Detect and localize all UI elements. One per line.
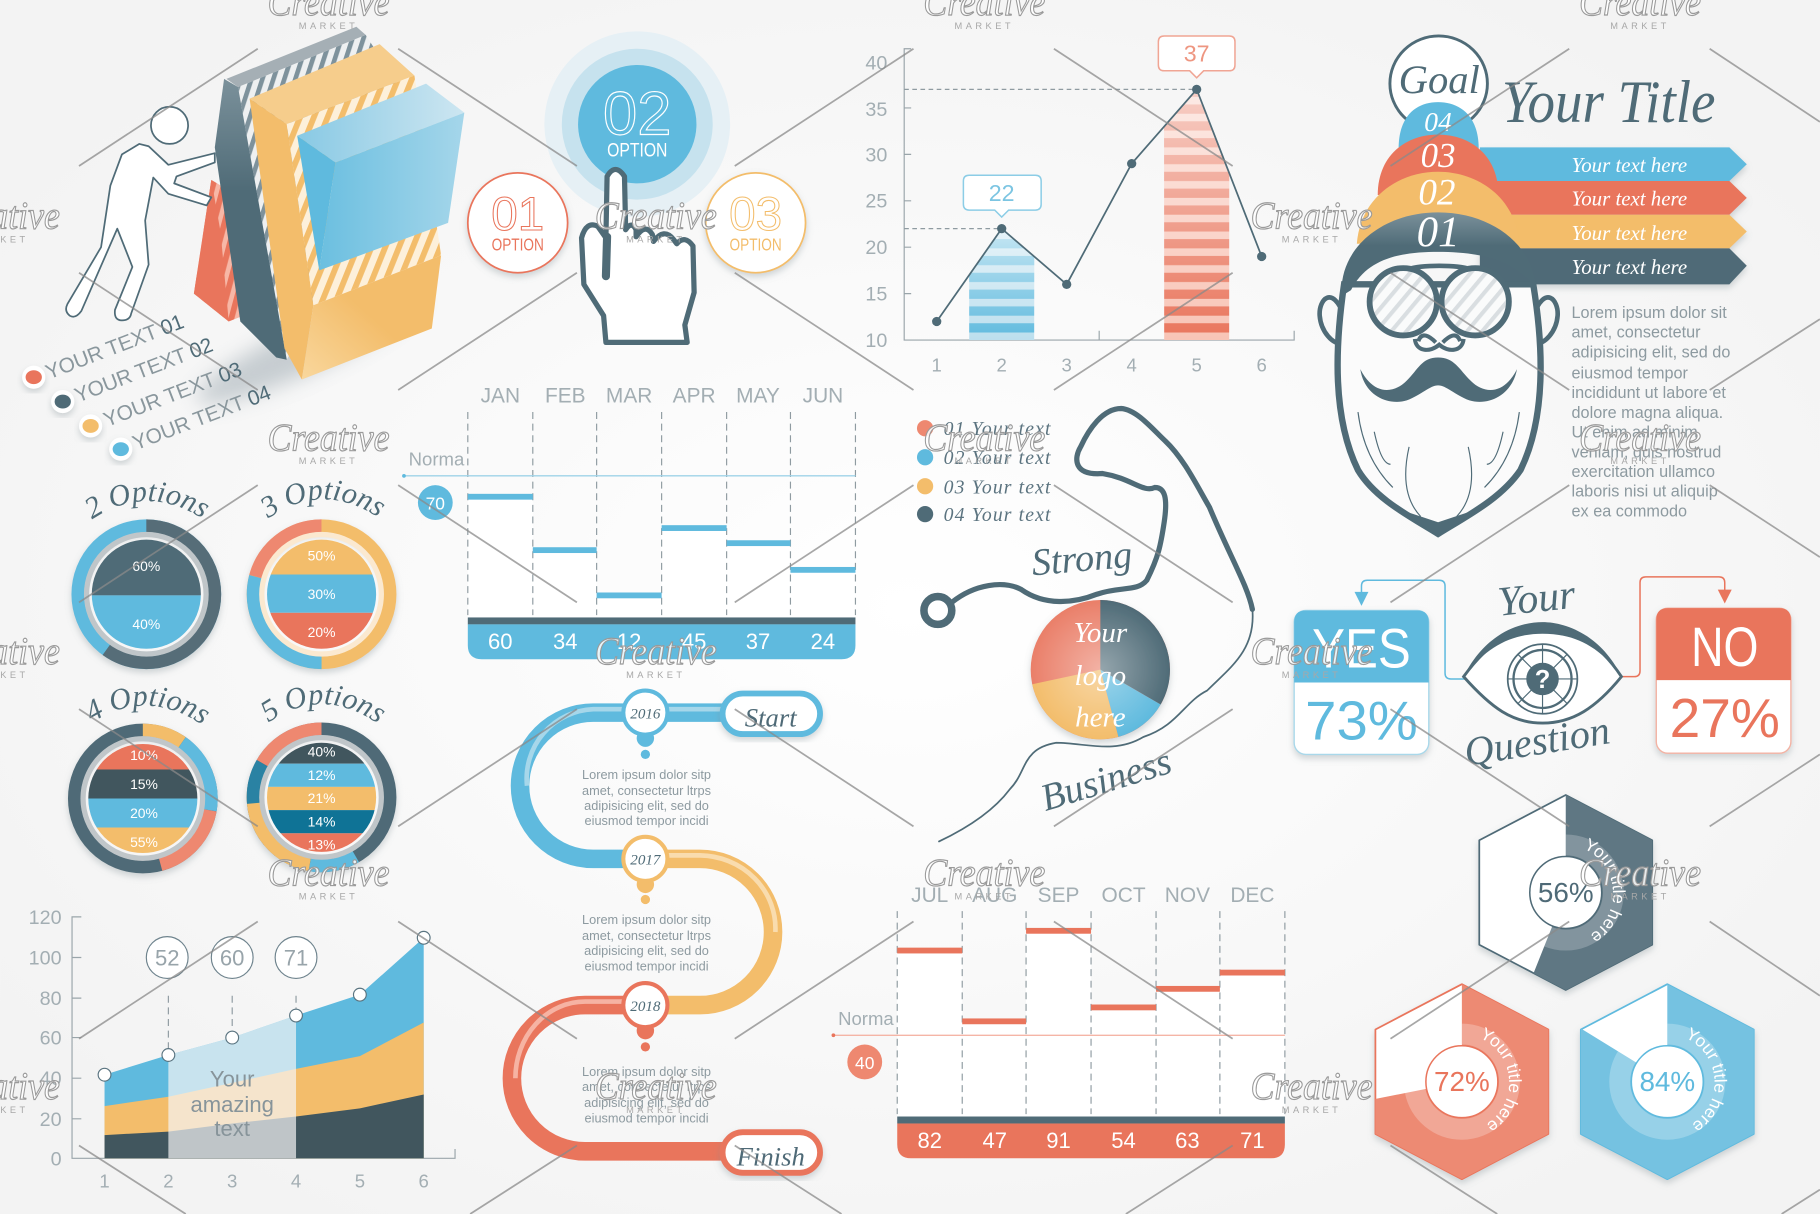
goal bubble	[1390, 36, 1487, 131]
watermarks: MARKET	[1282, 670, 1341, 680]
lorem block 3: adipisicing elit, sed do	[584, 1095, 709, 1110]
logo text: Your	[1073, 617, 1128, 649]
options donut 3: 20%	[308, 624, 335, 640]
paragraph: veniam, quis nostrud	[1572, 443, 1721, 461]
your label: Your	[1496, 572, 1578, 626]
hipster head: 01	[1417, 209, 1460, 256]
hat layers	[1357, 102, 1519, 244]
lorem block 1: adipisicing elit, sed do	[584, 798, 709, 813]
options donut 2: 60%	[132, 558, 160, 574]
value strip: 34	[553, 629, 578, 654]
amazing text: amazing	[191, 1092, 274, 1117]
goal bubble: Goal	[1399, 57, 1480, 102]
options donut 3: 30%	[308, 586, 335, 602]
options donut 4: 15%	[130, 776, 158, 792]
node 2016	[623, 691, 667, 759]
hexagon 84 percent: 84%	[1639, 1066, 1695, 1097]
line chart with striped bars	[865, 36, 1294, 375]
y axis labels: 35	[865, 99, 887, 121]
y axis labels: 0	[51, 1148, 62, 1170]
x axis labels: 4	[291, 1170, 301, 1191]
y axis labels: 60	[40, 1028, 62, 1050]
area chart: 60	[220, 946, 244, 971]
legend	[917, 418, 1051, 526]
lorem block 1: amet, consectetur ltrps	[582, 783, 711, 798]
data line	[932, 85, 1266, 326]
red striped bar	[1164, 89, 1229, 340]
person pushing	[66, 107, 215, 320]
finish pill: Finish	[736, 1141, 805, 1171]
strong label: Strong	[1030, 534, 1134, 584]
month labels: NOV	[1165, 884, 1210, 907]
amazing text: Your	[210, 1066, 254, 1091]
options donut 5	[244, 686, 400, 878]
options donut 2: 40%	[132, 616, 160, 632]
norma line	[402, 448, 855, 520]
watermarks: Creative	[1251, 1064, 1373, 1108]
watermarks: MARKET	[1610, 456, 1670, 466]
dark area	[105, 1094, 424, 1158]
norma line: 70	[426, 494, 445, 514]
paragraph: exercitation ullamco	[1572, 463, 1715, 481]
yes box	[1294, 610, 1429, 754]
red road	[512, 1002, 743, 1151]
options donut 5: 12%	[308, 767, 335, 783]
logo text: here	[1075, 702, 1126, 734]
lorem block 2	[582, 912, 711, 973]
month labels: JUL	[911, 884, 948, 907]
options donut 4: 20%	[130, 805, 158, 821]
y axis labels: 80	[40, 988, 62, 1010]
option 03: OPTION	[730, 235, 782, 255]
hat layers: 03	[1421, 136, 1455, 175]
your title panel: Your text here	[1572, 153, 1687, 177]
heading: 3 Options	[261, 480, 384, 518]
red block	[194, 180, 240, 321]
watermarks: Creative	[1251, 194, 1373, 238]
options donut 4	[65, 688, 220, 880]
isometric legend	[22, 310, 274, 461]
x axis labels: 2	[163, 1170, 174, 1191]
value strip: 60	[488, 629, 513, 654]
month labels: DEC	[1230, 884, 1274, 907]
lorem block 1	[582, 767, 711, 828]
lorem block 1: Lorem ipsum dolor sitp	[582, 767, 711, 782]
node 2016: 2016	[630, 706, 661, 722]
yellow block	[250, 44, 441, 380]
paragraph: Ut enim ad minim	[1572, 424, 1698, 442]
your title panel: Your text here	[1572, 221, 1687, 245]
option 02: 02	[603, 80, 671, 149]
hexagon 56 percent	[1476, 794, 1656, 996]
paragraph: amet, consectetur	[1572, 324, 1701, 342]
option 01: 01	[491, 188, 544, 241]
value strip	[897, 1123, 1285, 1158]
watermarks: MARKET	[299, 891, 358, 901]
watermarks: Creative	[1579, 415, 1701, 459]
strong arm panel	[917, 409, 1253, 841]
month labels: AUG	[972, 884, 1017, 907]
hexagon 56 percent: 56%	[1538, 877, 1594, 908]
lorem block 3: amet, consectetur ltrps	[582, 1079, 711, 1094]
area chart	[29, 907, 455, 1191]
options donut 5: 14%	[308, 813, 335, 829]
month labels: OCT	[1102, 884, 1146, 907]
options donut 4: 55%	[130, 834, 158, 850]
watermarks: MARKET	[1282, 1105, 1341, 1115]
your title panel: Your text here	[1572, 186, 1687, 210]
month labels: FEB	[545, 385, 586, 408]
watermarks: Creative	[923, 415, 1045, 459]
x axis labels: 1	[932, 354, 942, 375]
hipster head	[1320, 209, 1558, 535]
your title panel: Your text here	[1572, 255, 1687, 279]
options donut 5: 13%	[308, 837, 335, 853]
x axis labels: 2	[997, 354, 1007, 375]
paragraph: laboris nisi ut aliquip	[1572, 483, 1718, 501]
hat layers: 02	[1418, 172, 1455, 213]
norma line: Norma	[838, 1008, 894, 1029]
amazing text	[191, 1066, 274, 1141]
area chart: 52	[155, 946, 179, 971]
paragraph: Lorem ipsum dolor sit	[1572, 304, 1727, 322]
y axis labels: 30	[865, 144, 887, 166]
ribbons	[1480, 147, 1747, 284]
y axis labels	[865, 53, 887, 352]
your title panel	[1320, 36, 1747, 535]
timeline road	[512, 691, 820, 1173]
area chart: 71	[284, 946, 308, 971]
level bars	[897, 928, 1285, 1024]
x axis labels: 5	[355, 1170, 365, 1191]
callout 22	[963, 175, 1041, 217]
x axis labels	[99, 1170, 429, 1191]
value strip: 47	[982, 1128, 1007, 1153]
callout 37: 37	[1184, 41, 1210, 67]
arm outline	[924, 409, 1253, 841]
y axis labels: 40	[40, 1068, 62, 1090]
legend: 01 Your text	[944, 418, 1051, 440]
options donut 5: 21%	[308, 790, 335, 806]
monthly chart red	[832, 884, 1285, 1158]
month labels: MAR	[606, 385, 652, 408]
paragraph: dolore magna aliqua.	[1572, 404, 1723, 422]
option circles with hand	[468, 31, 806, 342]
hat layers: 04	[1424, 107, 1452, 138]
month labels: MAY	[736, 385, 780, 408]
heading: 5 Options	[262, 686, 385, 722]
hexagon 72 percent: 72%	[1434, 1066, 1490, 1097]
paragraph	[1572, 304, 1730, 520]
watermarks: Creative	[268, 415, 389, 459]
paragraph: eiusmod tempor	[1572, 364, 1689, 382]
hexagon 72 percent	[1372, 983, 1552, 1185]
isometric legend: YOUR TEXT 03	[100, 358, 245, 432]
norma line: Norma	[409, 448, 465, 469]
x axis labels	[932, 354, 1267, 375]
yellow road	[647, 855, 775, 1005]
markers	[98, 931, 430, 1081]
value strip: 12	[617, 629, 641, 654]
no box	[1656, 608, 1791, 753]
x axis labels: 1	[99, 1170, 110, 1191]
month labels: SEP	[1038, 884, 1079, 907]
dark block	[215, 27, 418, 360]
paragraph: incididunt ut labore et	[1572, 384, 1726, 402]
value bubbles	[146, 937, 317, 978]
watermarks: MARKET	[626, 1105, 686, 1115]
start pill: Start	[745, 703, 797, 733]
legend: 04 Your text	[944, 504, 1051, 526]
y axis labels: 20	[865, 237, 887, 259]
no box: NO	[1691, 616, 1758, 678]
watermarks: Creative	[595, 194, 717, 238]
hexagon 56 percent: Your title here	[1588, 838, 1626, 941]
lorem block 2: adipisicing elit, sed do	[584, 943, 709, 958]
option 03: 03	[729, 188, 782, 241]
logo text: logo	[1075, 660, 1126, 692]
yes box: YES	[1312, 617, 1411, 679]
options donut 4: 10%	[130, 747, 158, 763]
value strip: 63	[1175, 1128, 1200, 1153]
option 01: OPTION	[492, 235, 544, 255]
hexagon 84 percent	[1577, 983, 1758, 1185]
finish pill	[723, 1132, 820, 1173]
hexagon 84 percent: Your title here	[1689, 1027, 1728, 1130]
blue striped bar	[969, 229, 1034, 340]
norma line: 40	[855, 1053, 874, 1073]
no box: 27%	[1670, 688, 1780, 749]
node 2017	[623, 837, 667, 904]
options donut 3	[244, 480, 400, 676]
watermarks: Creative	[1251, 629, 1373, 673]
x axis labels: 3	[1062, 354, 1072, 375]
callout 22: 22	[989, 180, 1015, 206]
option 01	[468, 173, 568, 273]
heading: 4 Options	[89, 688, 209, 723]
isometric legend: YOUR TEXT 01	[42, 310, 187, 384]
month labels: APR	[673, 385, 716, 408]
question panel	[1294, 572, 1791, 775]
lorem block 3: Lorem ipsum dolor sitp	[582, 1064, 711, 1079]
value strip	[468, 624, 855, 659]
amazing text: text	[214, 1116, 250, 1141]
lorem block 2: eiusmod tempor incidi	[585, 958, 709, 973]
lorem block 3	[582, 1064, 711, 1125]
node 2017: 2017	[630, 853, 662, 869]
y axis labels	[29, 907, 62, 1170]
hexagon 72 percent: Your title here	[1484, 1027, 1522, 1130]
isometric blocks with person	[66, 27, 464, 421]
blue area	[105, 938, 424, 1158]
watermarks: Creative	[1579, 851, 1701, 895]
x axis labels: 3	[227, 1170, 237, 1191]
yellow area	[105, 1022, 424, 1158]
option 02: OPTION	[607, 140, 667, 162]
blue road	[520, 709, 725, 859]
connectors	[1355, 577, 1732, 679]
y axis labels: 100	[29, 947, 62, 969]
option 02	[544, 31, 730, 217]
y axis labels: 120	[29, 907, 62, 929]
icon: eye: ?	[1535, 666, 1550, 694]
lorem block 1: eiusmod tempor incidi	[585, 813, 709, 828]
month labels	[911, 884, 1274, 907]
question label: Question	[1461, 707, 1613, 775]
watermarks: MARKET	[1282, 235, 1341, 245]
logo pie	[1031, 600, 1170, 739]
yes box: 73%	[1305, 690, 1418, 751]
logo text	[1073, 617, 1128, 734]
option 03	[706, 173, 806, 273]
node 2018	[623, 983, 667, 1052]
watermarks: MARKET	[955, 891, 1014, 901]
y axis labels: 10	[865, 330, 887, 352]
options donut 3: 50%	[308, 548, 335, 564]
x axis labels: 5	[1192, 354, 1202, 375]
value strip: 24	[811, 629, 835, 654]
watermarks: MARKET	[955, 456, 1014, 466]
callout 37	[1158, 36, 1235, 78]
y axis labels: 20	[40, 1109, 62, 1131]
level bars	[468, 494, 855, 598]
watermarks: MARKET	[299, 456, 358, 466]
watermarks: MARKET	[955, 21, 1014, 31]
month labels: JAN	[481, 385, 520, 408]
value strip: 91	[1046, 1128, 1071, 1153]
watermarks: Creative	[268, 851, 389, 895]
business label: Business	[1036, 740, 1176, 820]
y axis labels: 15	[865, 284, 887, 306]
y axis labels: 25	[865, 191, 887, 213]
isometric legend: YOUR TEXT 02	[71, 334, 216, 407]
month labels: JUN	[803, 385, 843, 408]
node 2018: 2018	[630, 999, 661, 1015]
x axis labels: 4	[1127, 354, 1137, 375]
lorem block 3: eiusmod tempor incidi	[585, 1110, 709, 1125]
watermarks: Creative	[923, 851, 1045, 895]
legend: 02 Your text	[944, 447, 1051, 469]
options donut 5: 40%	[308, 744, 335, 760]
isometric legend: YOUR TEXT 04	[129, 381, 274, 455]
value strip: 54	[1111, 1128, 1136, 1153]
watermarks: MARKET	[626, 670, 686, 680]
blue block	[297, 84, 464, 270]
icon: pointing hand	[582, 169, 694, 342]
lorem block 2: Lorem ipsum dolor sitp	[582, 912, 711, 927]
watermarks: MARKET	[1610, 891, 1670, 901]
icon: eye	[1464, 622, 1621, 723]
lorem block 2: amet, consectetur ltrps	[582, 928, 711, 943]
options donut 2	[68, 482, 224, 676]
x axis labels: 6	[1257, 354, 1267, 375]
watermarks: MARKET	[1610, 21, 1670, 31]
paragraph: ex ea commodo	[1572, 502, 1687, 520]
paragraph: adipisicing elit, sed do	[1572, 343, 1730, 361]
value strip: 71	[1240, 1128, 1265, 1153]
heading: 2 Options	[86, 482, 209, 520]
monthly chart blue	[402, 385, 855, 659]
start pill	[723, 693, 820, 734]
norma line	[832, 1008, 1285, 1079]
title: Your Title	[1502, 69, 1715, 136]
watermarks: Creative	[595, 629, 717, 673]
watermarks: MARKET	[626, 235, 686, 245]
month labels	[481, 385, 843, 408]
value strip: 82	[917, 1128, 942, 1153]
value strip: 37	[746, 629, 770, 654]
legend: 03 Your text	[944, 476, 1051, 498]
watermarks: MARKET	[299, 21, 358, 31]
x axis labels: 6	[419, 1170, 429, 1191]
y axis labels: 40	[865, 53, 887, 75]
watermarks: Creative	[595, 1064, 717, 1108]
value strip: 45	[682, 629, 706, 654]
